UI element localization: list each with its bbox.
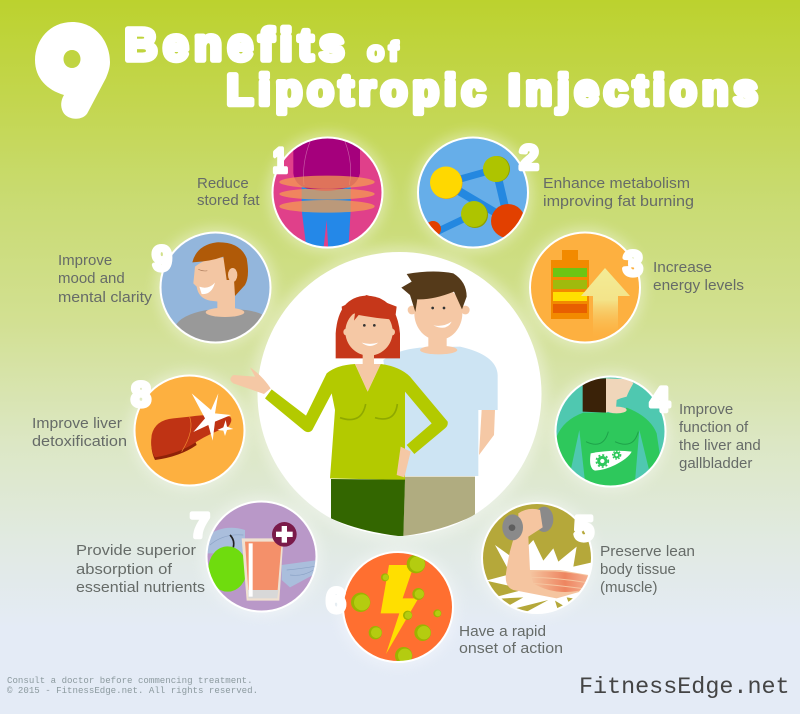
icon 9: smiling man [160,232,272,345]
label 1: Reduce [197,175,249,192]
label 4: Improve [679,401,733,418]
label 8: Improve liver [32,415,122,432]
central circle with couple [230,252,541,537]
label 2: improving fat burning [543,193,694,210]
icon 2: molecule [418,138,528,248]
label 2: Enhance metabolism [543,175,690,192]
label 9 [58,252,153,306]
label 1 [197,175,260,209]
label 1: stored fat [197,192,260,209]
label 6 [459,623,563,657]
icon 3: battery and arrow [530,232,640,342]
number 5: 5 [575,510,593,548]
number 4: 4 [651,381,670,419]
label 7: absorption of [76,561,173,578]
title line 1: Benefits [125,19,350,70]
number 6: 6 [327,582,345,620]
title line 2: Lipotropic Injections [227,66,763,114]
label 8 [32,415,127,450]
label 9: mood and [58,270,125,287]
icon 7: apple and juice [206,502,318,612]
label 4: function of [679,419,749,436]
label 7: Provide superior [76,542,196,559]
label 9: Improve [58,252,112,269]
label 3 [653,259,744,294]
number 9: 9 [153,240,171,278]
number 2: 2 [520,139,538,177]
label 2 [543,175,694,210]
label 3: energy levels [653,277,744,294]
woman [230,295,448,537]
label 5 [600,543,695,596]
label 8: detoxification [32,433,127,450]
label 4 [679,401,761,472]
number 7: 7 [191,507,209,545]
icon 8: liver with sparkle [134,376,244,486]
label 4: the liver and [679,437,761,454]
big numeral 9 [35,22,110,119]
title [35,19,763,119]
title word: of: of [368,36,403,66]
label 5: (muscle) [600,579,658,596]
label 6: Have a rapid [459,623,546,640]
number 3: 3 [624,245,642,283]
number 1: 1 [273,142,287,180]
icon 4: torso with liver [556,376,666,490]
label 3: Increase [653,259,712,276]
number 8: 8 [132,376,150,414]
brand: FitnessEdge.net [579,675,790,701]
label 7: essential nutrients [76,579,205,596]
label 9: mental clarity [58,289,153,306]
disclaimer: Consult a doctor before commencing treatment. [7,675,253,686]
label 6: onset of action [459,640,563,657]
icon 1: waist with fat rings [272,130,382,250]
label 5: body tissue [600,561,676,578]
label 4: gallbladder [679,455,752,472]
disclaimer [7,675,258,696]
label 7 [76,542,205,596]
man [383,271,498,536]
disclaimer: © 2015 - FitnessEdge.net. All rights reserved. [7,685,258,696]
icon 6: lightning and bubbles [343,552,453,664]
label 5: Preserve lean [600,543,695,560]
icon 5: flexed arm with dumbbell [482,503,595,613]
